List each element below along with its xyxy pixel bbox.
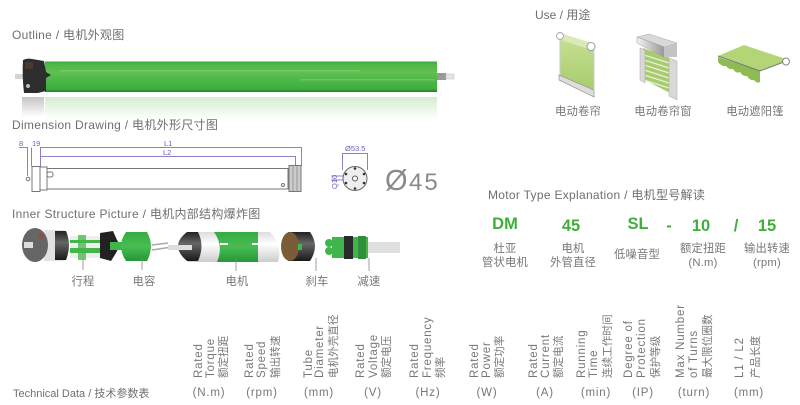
model code: - xyxy=(666,217,672,235)
table header: rotated column names: Rated xyxy=(528,343,540,378)
table header: rotated column names: Protection xyxy=(636,318,648,378)
part labels: 减速 xyxy=(358,275,380,288)
part: capacitor xyxy=(121,232,151,261)
table header: units: (W) xyxy=(477,387,497,399)
table header: rotated column names: Power xyxy=(481,341,493,378)
table header: units: (mm) xyxy=(304,387,334,399)
heading: technical data: Technical Data / 技术参数表 xyxy=(13,386,149,400)
motor head xyxy=(23,59,51,93)
table header: rotated column names xyxy=(193,304,762,378)
table header: rotated column names: Rated xyxy=(244,343,256,378)
model code: DM xyxy=(492,215,518,233)
end view drawing xyxy=(330,144,368,190)
dimension labels: 19 xyxy=(32,139,40,148)
dimension labels: 8 xyxy=(19,139,23,148)
dimension labels: L1 xyxy=(164,139,172,148)
model code: 15 xyxy=(758,217,776,235)
heading: motor type explanation: Motor Type Explanation / 电机型号解读 xyxy=(488,188,705,202)
model code explanations: 电机 xyxy=(562,241,585,255)
model code explanations: 输出转速 xyxy=(744,241,790,255)
model code: 45 xyxy=(562,217,580,235)
table header: units xyxy=(193,387,764,399)
part: reducer xyxy=(325,236,400,259)
model code xyxy=(492,215,776,235)
heading: use: Use / 用途 xyxy=(535,7,590,22)
table header: units: (Hz) xyxy=(416,387,440,399)
table header: rotated column names: 额定电流 xyxy=(552,335,565,378)
model code explanations: 管状电机 xyxy=(482,255,528,269)
part: wires xyxy=(152,243,172,250)
model code: SL xyxy=(627,215,649,233)
motor outline illustration xyxy=(15,59,454,119)
table header: units: (turn) xyxy=(678,387,710,399)
end view drawing: Q10 xyxy=(330,175,339,189)
model code explanations: (N.m) xyxy=(688,257,718,269)
use labels xyxy=(555,104,784,118)
table header: rotated column names: Rated xyxy=(409,343,421,378)
table header: rotated column names: 输出转速 xyxy=(269,335,282,378)
dimension labels xyxy=(19,139,172,157)
heading: inner structure: Inner Structure Picture / 电机内部结构爆炸图 xyxy=(12,206,261,221)
table header: rotated column names: Rated xyxy=(355,343,367,378)
dimension lines xyxy=(19,147,302,176)
table header: rotated column names: Time xyxy=(588,350,600,378)
table header: rotated column names: Speed xyxy=(256,341,268,378)
model code: 10 xyxy=(692,217,710,235)
use labels: 电动遮阳篷 xyxy=(726,104,784,118)
table header: rotated column names: 产品长度 xyxy=(749,335,762,378)
table header: rotated column names: Current xyxy=(540,334,552,378)
table header: rotated column names: Degree of xyxy=(623,320,635,378)
part labels: 电机 xyxy=(226,274,249,288)
table header: units: (IP) xyxy=(632,387,654,399)
table header: rotated column names: Rated xyxy=(193,343,205,378)
part labels: 行程 xyxy=(72,275,94,288)
table header: rotated column names: Diameter xyxy=(314,325,326,378)
table header: rotated column names: 频率 xyxy=(434,356,447,378)
model code explanations: 外管直径 xyxy=(550,255,596,269)
table header: rotated column names: 保护等级 xyxy=(649,335,662,378)
part labels xyxy=(72,274,380,288)
leader lines xyxy=(83,258,369,271)
table header: units: (N.m) xyxy=(193,387,225,399)
table header: rotated column names: 额定扭距 xyxy=(217,335,230,378)
model code: / xyxy=(734,217,739,235)
table header: rotated column names: 额定电压 xyxy=(380,335,393,378)
icon: roller blind xyxy=(556,32,595,97)
use labels: 电动卷帘窗 xyxy=(634,104,692,118)
model code explanations: 杜亚 xyxy=(494,241,516,255)
use labels: 电动卷帘 xyxy=(555,104,601,118)
table header: units: (rpm) xyxy=(246,387,278,399)
part: limit unit xyxy=(22,228,122,262)
dimension labels: L2 xyxy=(163,148,171,157)
part labels: 刹车 xyxy=(306,274,328,288)
heading: dimension drawing: Dimension Drawing / 电机外形尺寸图 xyxy=(12,118,218,132)
dimension drawing xyxy=(19,139,302,192)
end view drawing: Ø53.5 xyxy=(345,144,365,153)
table header: rotated column names: Rated xyxy=(469,343,481,378)
icon: awning xyxy=(718,45,790,83)
green tube xyxy=(45,62,437,92)
table header: rotated column names: Tube xyxy=(303,349,315,378)
table header: rotated column names: 额定功率 xyxy=(493,335,506,378)
model code explanations xyxy=(482,241,790,269)
diameter label: Ø xyxy=(385,165,408,197)
table header: rotated column names: Running xyxy=(576,330,588,378)
table header: units: (mm) xyxy=(734,387,764,399)
table header: rotated column names: Voltage xyxy=(368,334,380,378)
part: motor xyxy=(168,232,279,262)
model code explanations: (rpm) xyxy=(753,257,781,269)
table header: rotated column names: 最大限位圈数 xyxy=(701,314,714,378)
table header: rotated column names: L1 / L2 xyxy=(734,337,746,378)
tube reflection xyxy=(22,97,437,119)
diameter label xyxy=(385,165,440,197)
table header: units: (A) xyxy=(536,387,554,399)
table header: rotated column names: Torque xyxy=(205,338,217,378)
table header: rotated column names: of Turns xyxy=(688,330,700,378)
heading: outline: Outline / 电机外观图 xyxy=(12,28,125,42)
exploded motor illustration xyxy=(22,228,400,271)
icon: roller shutter xyxy=(637,34,677,100)
table header: rotated column names: 电机外壳直径 xyxy=(327,314,340,378)
table header: units: (min) xyxy=(581,387,611,399)
diameter label: 45 xyxy=(409,169,440,196)
part: brake xyxy=(281,232,315,261)
left stub xyxy=(15,74,23,79)
part labels: 电容 xyxy=(132,274,156,288)
motor body xyxy=(26,166,301,192)
right shaft xyxy=(437,73,454,80)
table header: rotated column names: 连续工作时间 xyxy=(601,314,614,378)
table header: rotated column names: Frequency xyxy=(422,316,434,378)
table header: rotated column names: Max Number xyxy=(675,304,687,378)
model code explanations: 低噪音型 xyxy=(614,247,660,261)
table header: units: (V) xyxy=(364,387,382,399)
model code explanations: 额定扭距 xyxy=(680,241,726,255)
